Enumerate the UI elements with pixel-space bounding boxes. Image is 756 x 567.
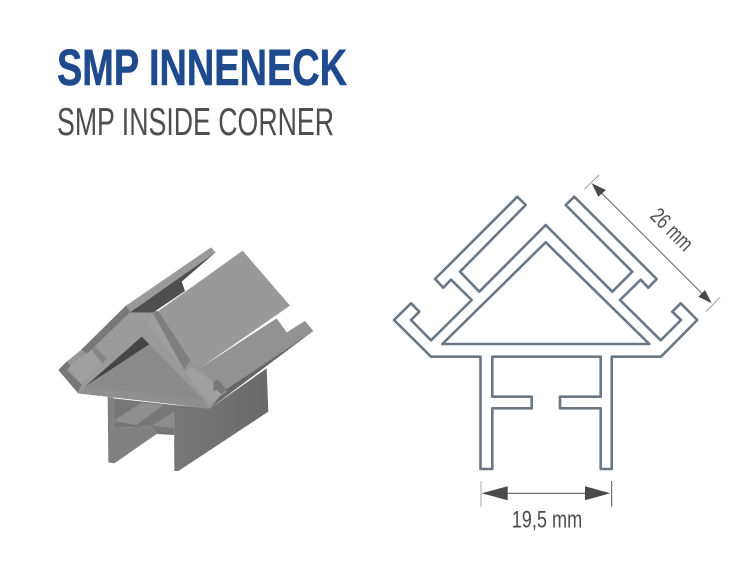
profile outline: [394, 197, 697, 469]
profile cross-section drawing: [394, 197, 697, 469]
3D render of profile: [58, 247, 313, 471]
dimension: 26 mm: [584, 175, 720, 312]
dimension: 19,5 mm: 19,5 mm: [512, 507, 582, 534]
title: SMP INNENECK: [57, 39, 347, 96]
inner triangle: [442, 242, 649, 344]
subtitle: SMP INSIDE CORNER: [57, 101, 334, 144]
dimension: 19,5 mm: [481, 481, 612, 534]
dimension: 26 mm: 26 mm: [645, 203, 698, 256]
